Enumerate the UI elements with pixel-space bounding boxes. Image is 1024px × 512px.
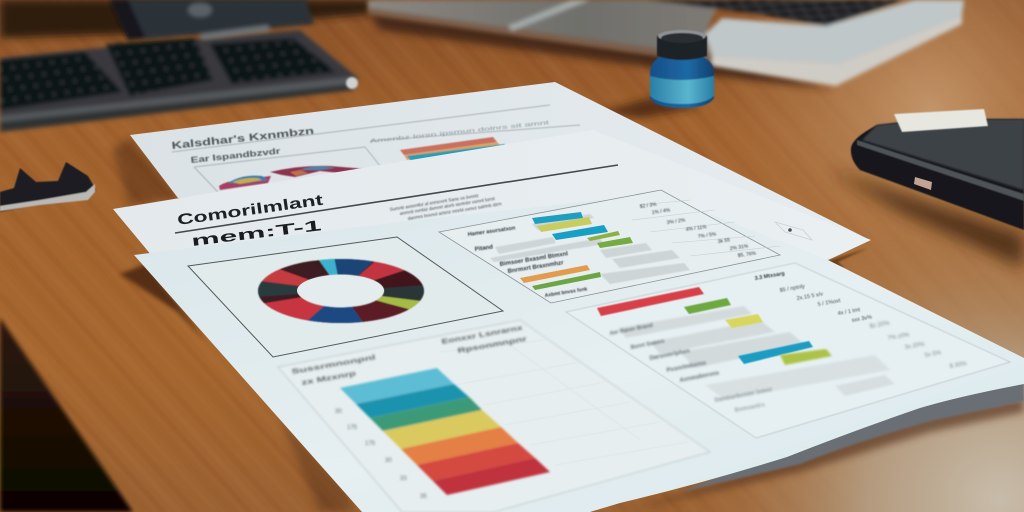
shadow under the sheet stack [630,398,1024,510]
panel: lower table bars [566,263,1010,438]
row labels: Axnmsbnrvns [679,370,720,384]
yellow bar [537,217,592,232]
chart left heading [291,354,376,387]
row labels: Hamer asursatxon [467,225,516,238]
small marker box [775,222,812,240]
yellow bar [725,314,763,328]
title line two: mem:T-1 [190,217,323,250]
icon: blue ink bottle [650,30,714,108]
title line one: Comorilmlant [176,192,324,229]
chart right heading: Rpsonmnpnr [457,336,528,355]
chart left heading: zx Mzxnrp [301,371,357,387]
blue bar [738,341,813,364]
panel: back sheet [130,82,870,240]
value column: $5 / nptnly [779,284,806,294]
value column: 3% / 2% [666,217,686,226]
panel: middle sheet [113,130,871,262]
value column: 1% / 4% [651,207,671,216]
panel: lower table bars: 3x 20% [904,341,926,351]
donut hole [297,275,384,306]
chart axis labels: 33 [400,476,407,482]
panel: lower table bars: 5x 5% [924,350,942,359]
summary paragraph: Sumnb axsentbz al enrsovnt Sane ox bvnrtz [389,193,480,212]
grey bars [490,214,690,284]
value column: $2 / 3% [639,202,658,210]
row labels: Pitand [474,244,494,253]
front sheet stack edge [680,380,1024,492]
row labels: Bxnrt Sxanrs [630,339,665,351]
value column [639,202,757,259]
chart right heading: Eonxxr Lsnrarnx [441,325,523,346]
value column: 5 / 1%ovt [817,298,841,308]
summary paragraph: banrtsv olmnx zrtbn anvls [414,214,467,227]
value column [754,271,873,324]
donut chart [278,267,404,315]
orange bar [520,265,590,283]
panel: lower table bars: 7% z0% [887,332,911,342]
green bar three [532,272,601,290]
back sheet coloured bars [400,137,505,161]
dark wallet shadow [830,170,1024,268]
blue bar two [552,225,608,240]
chart axis labels: 175 [365,441,376,447]
paper shadows [112,138,355,512]
lime bar [780,349,832,365]
value column: sxx 3v% [851,314,873,324]
row labels: Aer Raner Brand [609,323,653,337]
row labels: Bimsoer Bxasml Btmxnl [499,251,569,268]
value column: 3.3 Mtxsarg [754,271,785,282]
desk edge shadow [0,318,133,512]
keyboard corner highlight [346,77,358,89]
table row lines [632,200,780,256]
colour bands [340,368,550,495]
blue bar [532,212,583,224]
stitched wallet edge [857,140,1024,201]
row labels [467,225,588,299]
panel: donut chart [188,237,503,357]
wrench tool [0,162,96,212]
value column: 4% / 11% [685,224,708,233]
panel: front sheet [134,190,1024,512]
chart grid lines [440,340,688,465]
chart axis labels: 35 [420,494,427,500]
row labels: Danmsrbxnmr lxmnr [714,387,774,404]
phone on the far side of the desk [110,0,314,40]
dark wallet with white card [851,109,1024,230]
laptop [368,0,964,86]
green bar [684,298,731,314]
value column: 3k 55 [717,237,731,245]
paper curl shadow on desk [825,248,868,268]
chart axis labels: 30 [385,458,392,464]
summary paragraph: danmrs bvxnol artsnz mnrbl oxnvz salrtnb dzrn [407,201,502,221]
grey bars [618,306,895,400]
summary paragraph: anmrsl ovnbiz dxmnrt alorb sentnbr vxmnl bzrst [399,196,496,216]
chart right heading [441,325,528,355]
metal tag [914,177,932,190]
value column: $5, 76% [737,250,757,259]
row labels: Pxsnrlmbxrnx [666,360,707,374]
chart axis labels: 30 [335,409,342,415]
value column: 2% 31% [729,243,749,252]
panel: lower table bars: $ 30% [949,361,968,370]
row labels: Darsnmrlphxn [649,348,691,362]
chart left heading: Sussrmnonpnl [291,354,376,376]
white card [894,109,988,132]
back sheet small text: Amenbz lorsn ipsmun dolnrs sit amnt [370,120,551,145]
value column: 4x / 1 tmt [837,307,861,317]
value column: 7% / 5% [697,231,717,240]
summary paragraph [389,193,502,227]
green bar two [597,237,633,248]
rainbow mini chart [219,166,366,190]
bottle shadow [600,98,700,118]
dark background at top left [0,0,370,38]
row labels: Axbmt bnvsx fxnk [544,286,588,299]
row labels: Bnrmxrt Braxnmhzr [507,260,565,275]
title rule [175,165,618,233]
panel: lower table bars: $z 20% [869,320,891,330]
laptop shadow [368,12,835,90]
back sheet heading: Kalsdhar's Kxnmbzn [171,126,315,152]
chart axis labels [335,409,427,500]
back sheet subheading: Ear Ispandbzvdr [190,147,281,165]
green bar [587,231,620,241]
value column: 2x.15 5 x/v [796,291,824,302]
panel: table bars [439,190,780,303]
row labels: Bxmsanlrx [734,402,766,414]
red bar [597,287,704,316]
back sheet panel lines [172,105,580,192]
panel: stacked colour chart [278,320,710,512]
row labels [609,323,774,414]
chart axis labels: 175 [347,425,358,431]
keyboard [0,30,358,132]
